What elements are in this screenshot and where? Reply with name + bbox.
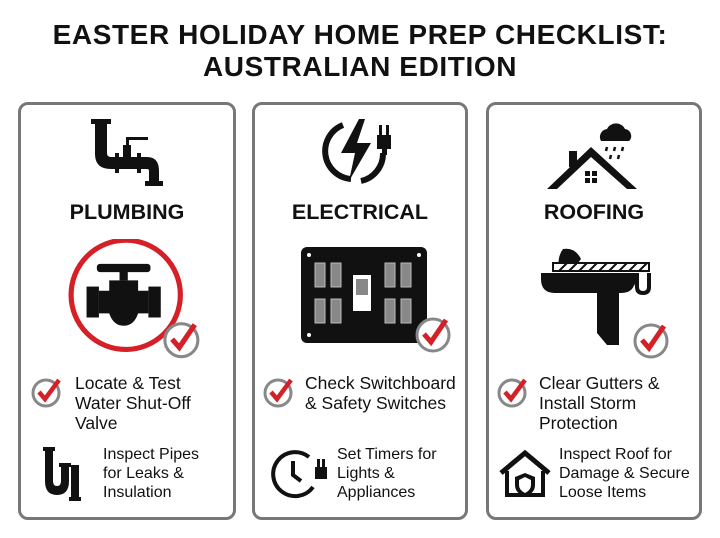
icon: valve in red circle — [68, 239, 200, 358]
icon: house with rain — [547, 123, 637, 189]
panel: roofing — [486, 102, 702, 520]
item: timers: Appliances — [337, 484, 415, 501]
icon: switchboard — [301, 247, 450, 352]
checklist item: shut-off valve: Water Shut-Off — [75, 393, 191, 413]
item: inspect roof — [500, 446, 690, 501]
checklist item: gutters: Install Storm — [539, 393, 636, 413]
title: AUSTRALIAN EDITION — [203, 51, 517, 82]
icon: lightning plug — [322, 119, 391, 184]
checklist item: switchboard: & Safety Switches — [305, 393, 446, 413]
heading: ROOFING — [544, 200, 644, 224]
checklist item: switchboard — [264, 373, 456, 413]
heading: ELECTRICAL — [292, 200, 428, 224]
panel: plumbing — [18, 102, 236, 520]
title: EASTER HOLIDAY HOME PREP CHECKLIST: — [53, 19, 667, 50]
icon: pipes — [91, 119, 163, 186]
item: inspect pipes: Inspect Pipes — [103, 446, 199, 463]
item: timers: Set Timers for — [337, 446, 437, 463]
checklist item: gutters: Protection — [539, 413, 618, 433]
item: inspect pipes — [43, 446, 199, 501]
checklist item: gutters — [498, 373, 660, 433]
checklist item: shut-off valve: Valve — [75, 413, 117, 433]
checklist item: gutters: Clear Gutters & — [539, 373, 660, 393]
item: inspect roof: Loose Items — [559, 484, 646, 501]
icon: gutter — [541, 248, 668, 358]
item: timers — [271, 446, 437, 501]
item: timers: Lights & — [337, 465, 395, 482]
item: inspect pipes: for Leaks & — [103, 465, 184, 482]
item: inspect pipes: Insulation — [103, 484, 172, 501]
heading: PLUMBING — [70, 200, 184, 224]
checklist item: shut-off valve: Locate & Test — [75, 373, 181, 393]
panel: electrical — [252, 102, 468, 520]
item: inspect roof: Inspect Roof for — [559, 446, 672, 463]
checklist item: switchboard: Check Switchboard — [305, 373, 456, 393]
item: inspect roof: Damage & Secure — [559, 465, 690, 482]
title — [53, 19, 667, 82]
checklist item: shut-off valve — [32, 373, 191, 433]
